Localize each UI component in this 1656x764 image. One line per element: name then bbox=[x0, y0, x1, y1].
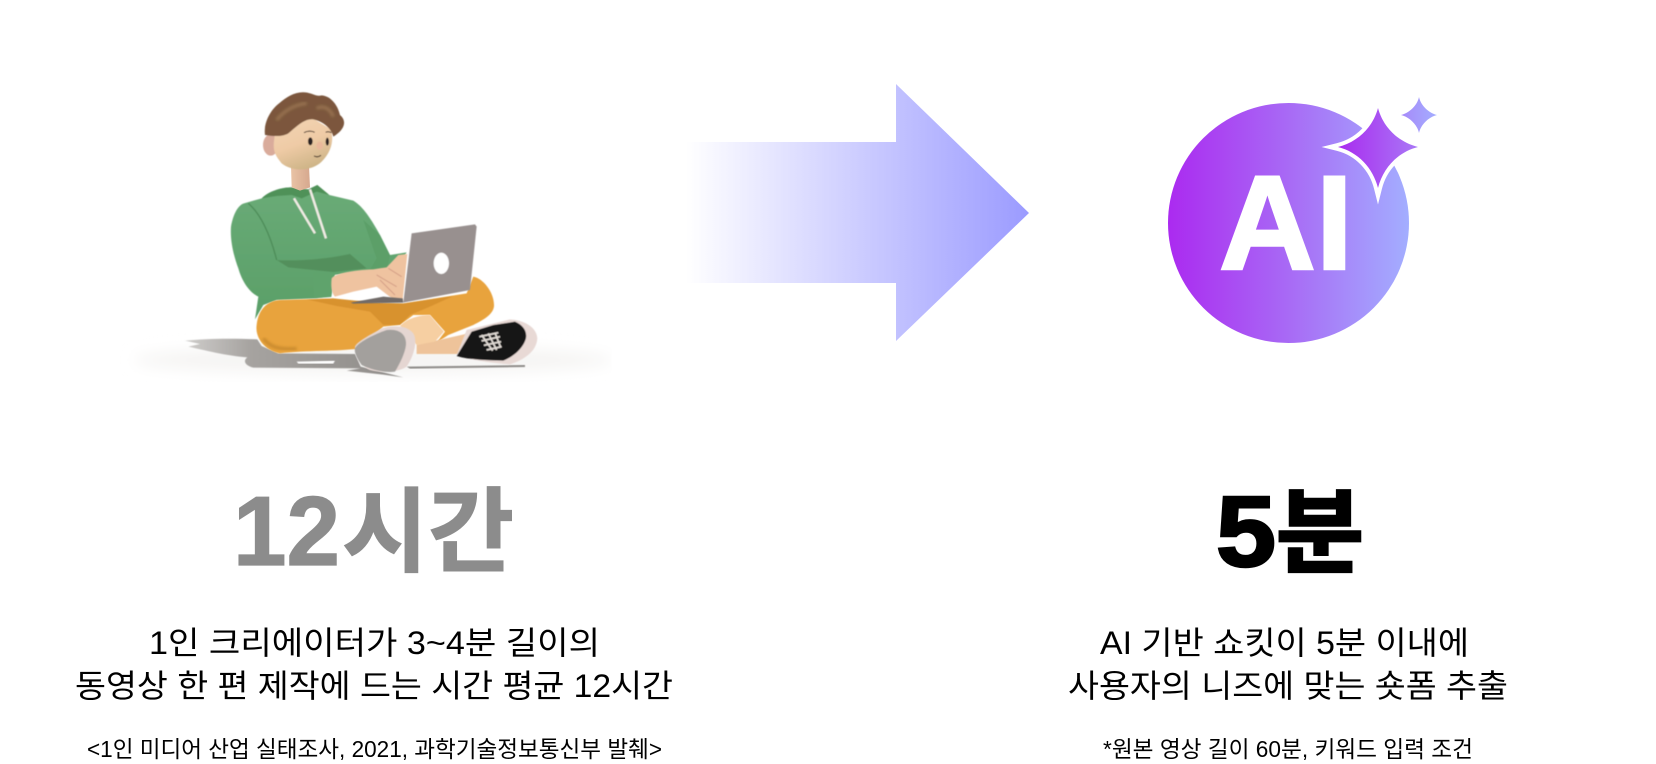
laptop bbox=[351, 224, 477, 304]
hand bbox=[331, 254, 407, 300]
left heading: 12시간: 시간 bbox=[342, 482, 514, 584]
left description: 동영상 한 편 제작에 드는 시간 평균 12시간 bbox=[75, 668, 673, 704]
illustration: person sitting with laptop bbox=[133, 92, 613, 377]
left source note: <1인 미디어 산업 실태조사, 2021, 과학기술정보통신부 발췌> bbox=[87, 736, 662, 762]
arrow bbox=[686, 84, 1029, 341]
left heading: 12시간 bbox=[233, 476, 514, 586]
left description: 1인 크리에이터가 3~4분 길이의 bbox=[149, 625, 600, 661]
shoe: sole bbox=[355, 326, 415, 372]
pants bbox=[256, 277, 494, 353]
right description: AI 기반 쇼킷이 5분 이내에 bbox=[1100, 625, 1469, 661]
large sparkle bbox=[1338, 108, 1418, 188]
head bbox=[263, 92, 344, 169]
right description: 사용자의 니즈에 맞는 숏폼 추출 bbox=[1068, 668, 1508, 704]
right heading: 5분 bbox=[1216, 476, 1364, 588]
left heading: 12시간: 12 bbox=[233, 476, 340, 586]
hoodie bbox=[231, 185, 407, 319]
left description bbox=[75, 625, 673, 704]
small sparkle bbox=[1401, 97, 1437, 133]
AI icon bbox=[1168, 97, 1437, 343]
AI letters: AI bbox=[1219, 149, 1353, 298]
right heading: 5분: 분 bbox=[1276, 483, 1364, 585]
right footnote: *원본 영상 길이 60분, 키워드 입력 조건 bbox=[1103, 736, 1473, 762]
right description bbox=[1068, 625, 1508, 704]
circle bbox=[1168, 103, 1409, 343]
ground shadow bbox=[168, 338, 578, 378]
legs bbox=[400, 315, 474, 354]
shoe: black bbox=[457, 319, 537, 364]
neck bbox=[291, 165, 310, 191]
right heading: 5분: 5 bbox=[1216, 476, 1276, 588]
